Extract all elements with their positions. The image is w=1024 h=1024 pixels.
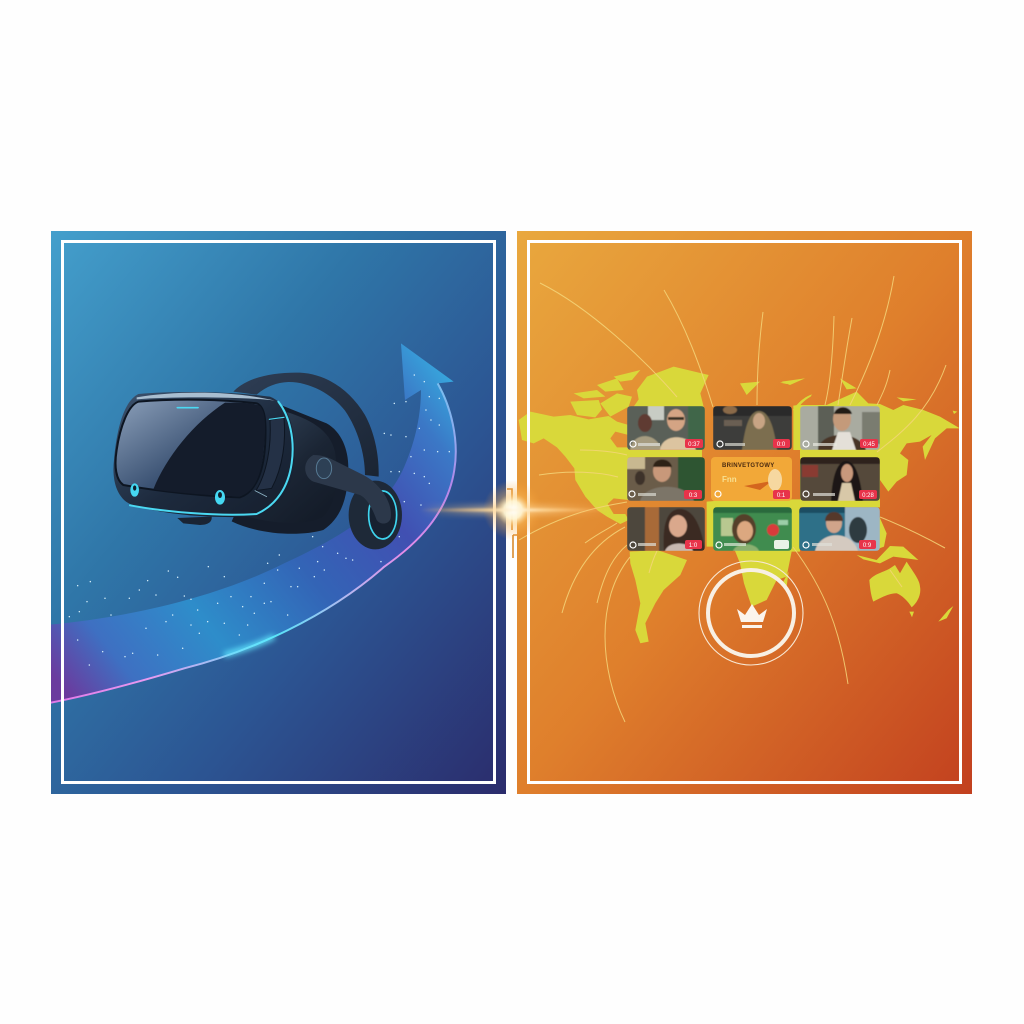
card 2: person in hood [713, 406, 792, 450]
lens flare [420, 480, 610, 540]
card 5: promo card: 0:1 [777, 493, 786, 499]
card 1: two people: 0:37 [688, 442, 700, 448]
card 6: woman portrait [800, 457, 880, 501]
headset rear body [232, 403, 348, 534]
card 4: man selfie: 0:3 [689, 493, 698, 499]
card 4: man selfie [627, 457, 705, 501]
cyan light bars [130, 402, 293, 515]
video call cards [627, 406, 880, 551]
card 7: woman with dark hair [627, 507, 705, 551]
swoosh ribbon with rising arrow [48, 343, 456, 703]
side ear disc [349, 481, 402, 549]
glass [116, 400, 266, 497]
nose piece [177, 517, 212, 525]
front sensors [130, 483, 225, 505]
card 9: blue card [799, 507, 880, 551]
centre connector bracket [507, 489, 517, 558]
card avatar dots [629, 441, 809, 548]
africa [707, 378, 805, 607]
card 6: woman portrait: 0:28 [862, 493, 874, 499]
card 5: promo card [711, 457, 792, 501]
radiating connection lines [519, 276, 946, 722]
inner white frame [528, 242, 960, 782]
card 5: promo card: Fnn [722, 475, 737, 484]
card 9: blue card: 0:9 [863, 543, 872, 549]
rear body highlight [286, 412, 331, 476]
panel: global creators (orange) [517, 231, 972, 794]
card 7: woman with dark hair: 1:0 [689, 543, 698, 549]
head strap [233, 373, 379, 477]
card 1: two people [627, 406, 705, 450]
icon: VR headset [113, 373, 402, 549]
card 3: man in forest [800, 406, 880, 450]
panel: VR growth (blue) [48, 231, 506, 794]
world map [519, 367, 960, 643]
card 3: man in forest: 0:45 [863, 442, 875, 448]
side arm [305, 455, 391, 524]
asia, oceania [780, 378, 960, 622]
glass dark reflection [153, 403, 265, 496]
card 5: promo card: BRINVETGTOWY [722, 463, 774, 469]
front visor shell [113, 392, 295, 517]
inner white frame [62, 242, 494, 782]
inner right rim [256, 417, 285, 491]
arm hinge [316, 458, 332, 479]
star particles [69, 375, 449, 665]
card 2: person in hood: 0:0 [777, 442, 786, 448]
americas and arctic [519, 367, 709, 643]
crown badge [699, 561, 803, 665]
top highlight [137, 393, 275, 401]
card 8: green card [713, 507, 792, 551]
infographic canvas [51, 231, 972, 794]
